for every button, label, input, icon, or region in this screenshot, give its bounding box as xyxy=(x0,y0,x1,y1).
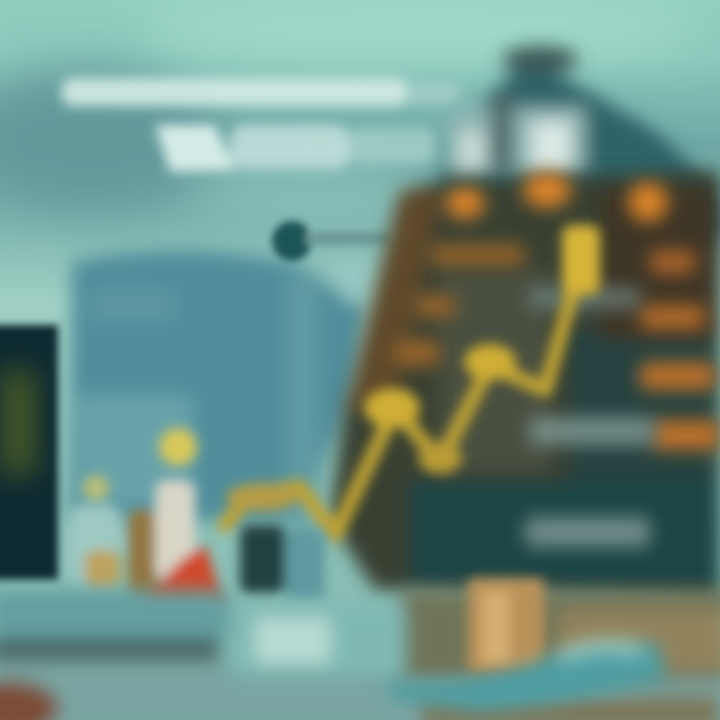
water wave xyxy=(385,640,665,712)
stacked coins xyxy=(468,578,544,673)
tower dome xyxy=(430,46,720,240)
crane top xyxy=(272,221,391,261)
yellow line chart xyxy=(225,225,600,535)
blurred title xyxy=(62,78,460,172)
foreground ground xyxy=(0,590,720,720)
background glass building xyxy=(70,251,375,555)
left dark screen xyxy=(0,325,58,580)
people at the foreground xyxy=(70,428,325,618)
grey window bands xyxy=(525,287,655,547)
orange tower windows xyxy=(395,172,720,450)
tower body xyxy=(330,170,720,600)
